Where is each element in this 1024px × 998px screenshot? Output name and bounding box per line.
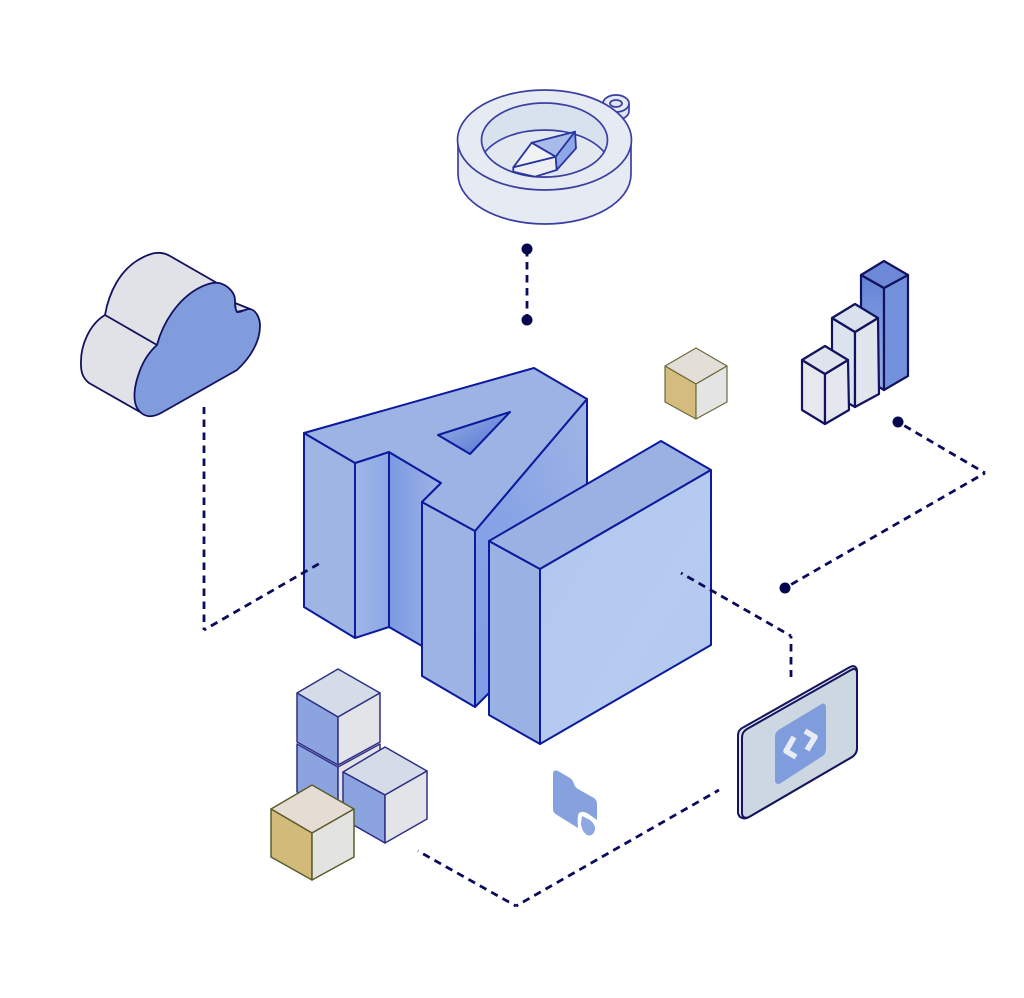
letter A inner side (389, 452, 441, 646)
icon: stacked cubes (271, 669, 427, 880)
letter A notch side (355, 452, 389, 638)
connector: bar chart to letter (780, 416, 985, 594)
cloud front (134, 283, 260, 416)
compass loop (603, 95, 629, 120)
letter I block (489, 441, 711, 744)
middle bar (832, 304, 879, 407)
tall bar (861, 261, 908, 390)
letter A leg face (422, 502, 475, 707)
upper blue cube (297, 669, 380, 765)
right blue cube (343, 747, 427, 843)
icon: folder (553, 770, 597, 835)
icon: compass (458, 90, 632, 224)
compass needle (513, 132, 576, 177)
code brackets (786, 731, 815, 757)
letter A left face (304, 433, 355, 638)
cloud side (81, 253, 217, 412)
connector: compass to letter (522, 244, 532, 326)
letter A right diagonal side (475, 399, 587, 707)
lower blue cube (297, 744, 380, 815)
icon: bar chart (802, 261, 908, 424)
icon: code tablet (738, 666, 857, 818)
tablet screen (742, 669, 857, 818)
icon: small gold cube (665, 348, 727, 419)
icon: cloud (81, 253, 260, 416)
letter A (304, 368, 587, 707)
folder drop mark (581, 816, 595, 835)
letter A top face (304, 368, 587, 531)
short bar (802, 346, 849, 424)
code badge (775, 704, 826, 784)
connector: cloud to letter A (204, 407, 322, 630)
connector: cubes to tablet (418, 790, 719, 906)
connector: block to tablet (681, 573, 791, 677)
gold cube (271, 785, 354, 880)
letter A counter triangle (438, 412, 510, 454)
